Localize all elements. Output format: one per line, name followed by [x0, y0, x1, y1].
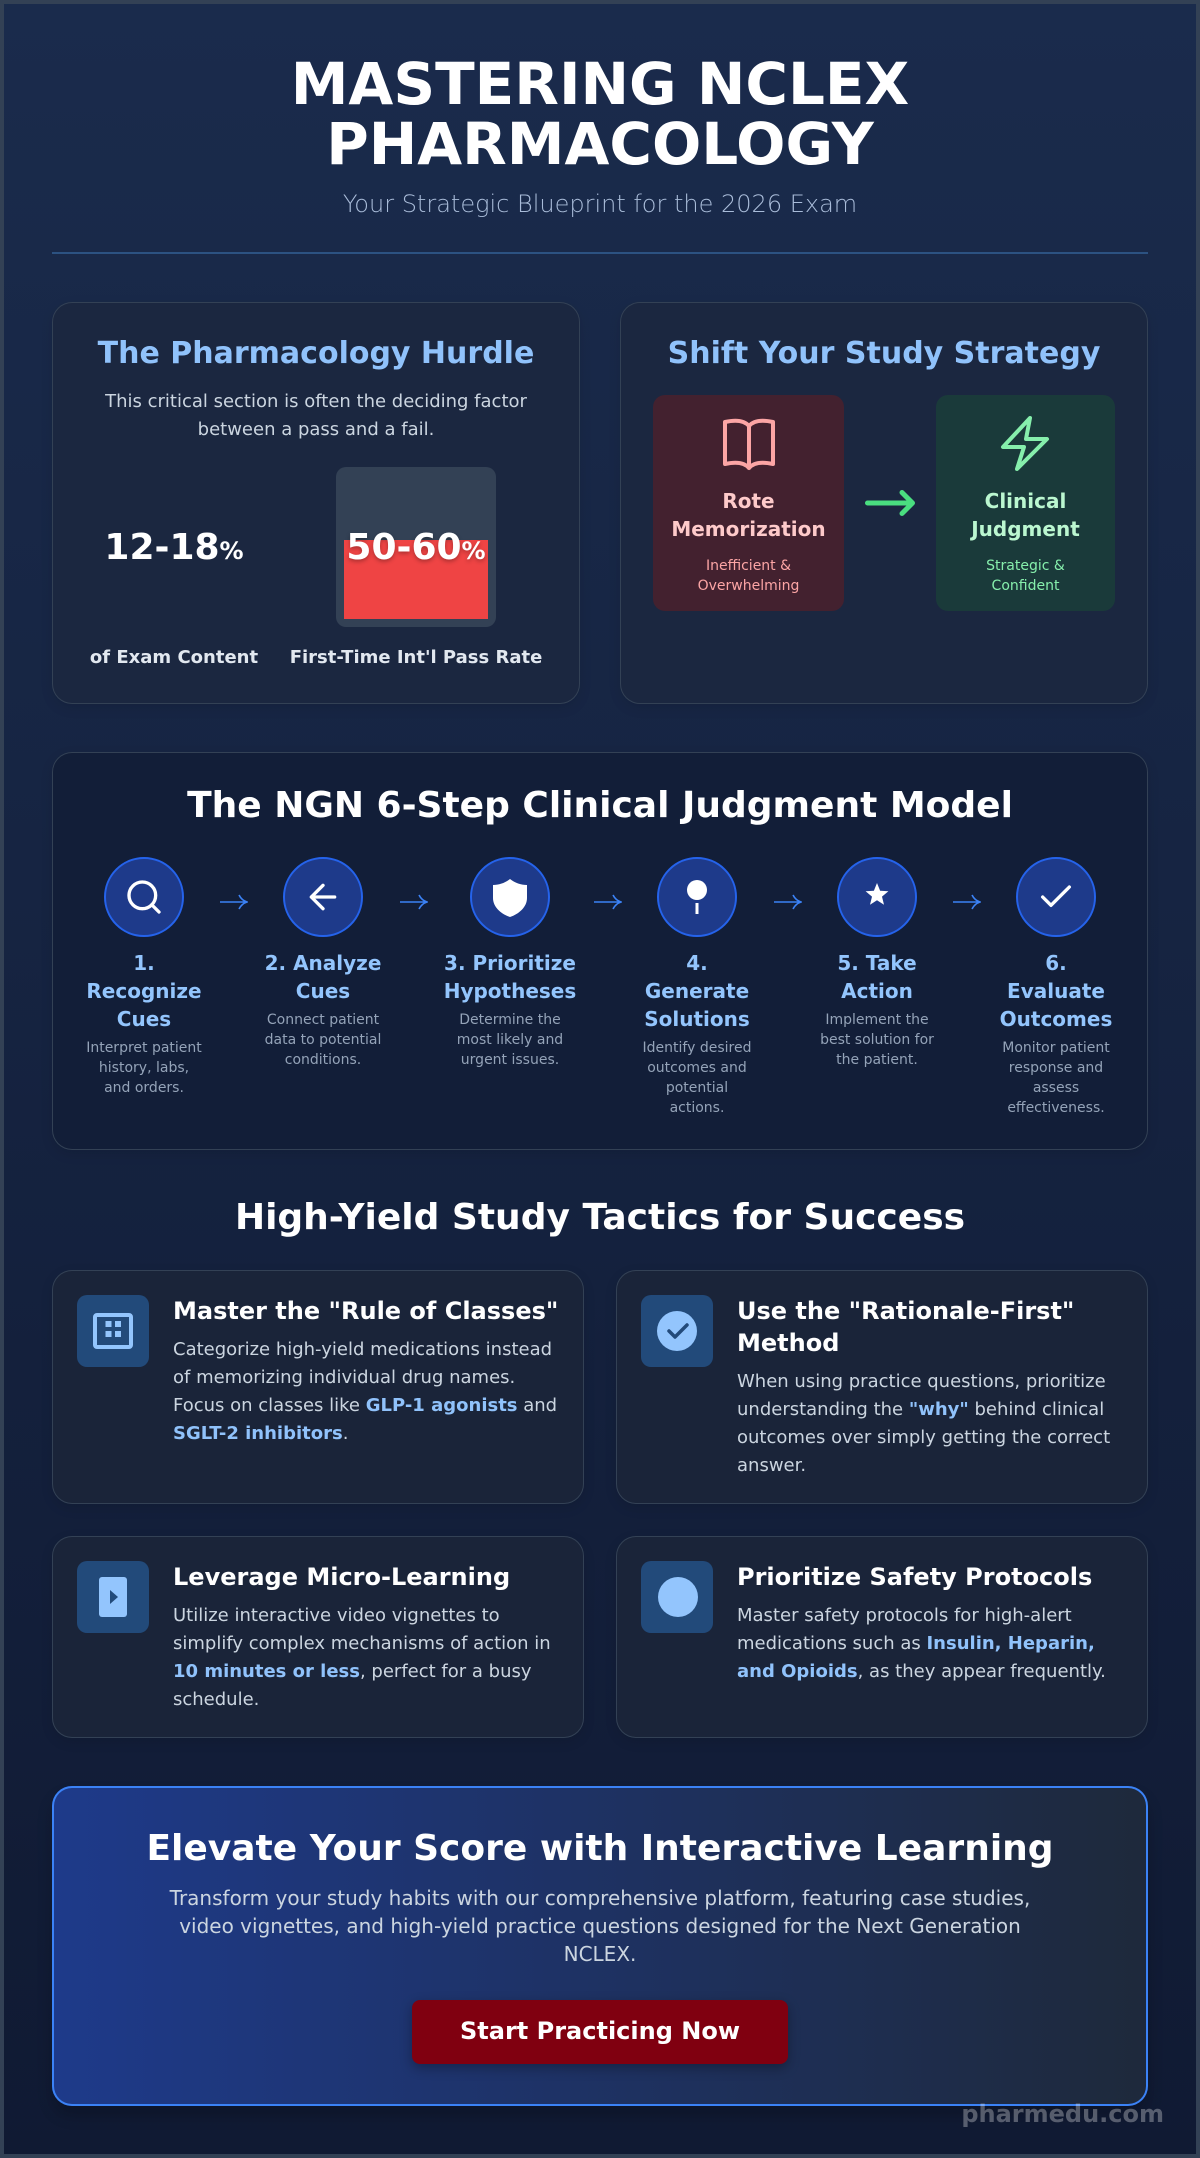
title: MASTERING NCLEX	[291, 50, 909, 118]
step 4: generate solutions: Solutions	[644, 1007, 750, 1031]
step 5: take action: Implement the	[825, 1012, 929, 1028]
icon: shield	[470, 857, 550, 937]
text: platform description: Transform your study habits with our comprehensive platform, featuring case studies,	[170, 1886, 1030, 1910]
label: clinical judgment: Clinical	[985, 489, 1066, 513]
caption: strategic: Strategic &	[986, 558, 1065, 574]
step 5: take action: the patient.	[836, 1052, 918, 1068]
box: rote memorization	[653, 395, 844, 611]
step 1: recognize cues: Recognize	[86, 979, 202, 1003]
text: rationale-first: outcomes over simply getting the correct	[737, 1427, 1110, 1448]
panel: rule of classes	[52, 1270, 584, 1504]
step 6: evaluate outcomes: response and	[1009, 1060, 1103, 1076]
step 2: analyze cues: conditions.	[285, 1052, 361, 1068]
label: rote memorization: Memorization	[671, 517, 826, 541]
text: rationale-first: answer.	[737, 1455, 806, 1476]
icon: open book	[723, 418, 775, 470]
step 5: take action: Action	[841, 979, 913, 1003]
step 6: evaluate outcomes: assess	[1033, 1080, 1079, 1096]
heading: elevate your score: Elevate Your Score with Interactive Learning	[146, 1828, 1054, 1869]
label: rote memorization	[671, 489, 826, 541]
text: platform description	[170, 1886, 1030, 1966]
step 4: generate solutions: outcomes and	[647, 1060, 747, 1076]
step 2: analyze cues: 2. Analyze	[265, 951, 381, 975]
button: start practicing	[412, 2000, 788, 2064]
heading: shift your study strategy: Shift Your Study Strategy	[668, 336, 1100, 371]
step 6: evaluate outcomes: Monitor patient	[1002, 1040, 1110, 1056]
subtitle: Your Strategic Blueprint for the 2026 Exam	[343, 190, 857, 218]
step 1: recognize cues: and orders.	[104, 1080, 184, 1096]
step 2: analyze cues: data to potential	[265, 1032, 381, 1048]
step 5: take action: best solution for	[820, 1032, 934, 1048]
icon: safety circle	[641, 1561, 713, 1633]
stat: 50-60%: 50-60%	[346, 527, 486, 568]
panel: micro-learning	[52, 1536, 584, 1738]
step 2: analyze cues	[265, 857, 381, 1068]
step 1: recognize cues: Cues	[117, 1007, 171, 1031]
heading: NGN model: The NGN 6-Step Clinical Judgment Model	[187, 785, 1013, 826]
panel: safety protocols	[616, 1536, 1148, 1738]
icon: arrow left	[283, 857, 363, 937]
step 3: prioritize hypotheses	[444, 857, 576, 1068]
icon: star	[837, 857, 917, 937]
step 5: take action	[820, 857, 934, 1068]
text: rule of classes: Categorize high-yield medications instead	[173, 1339, 552, 1360]
text: safety protocols: and Opioids, as they appear frequently.	[737, 1661, 1106, 1682]
label: clinical judgment: Judgment	[971, 517, 1080, 541]
text: rule of classes: Master the "Rule of Classes"	[173, 1297, 558, 1325]
arrow: rote to clinical	[865, 490, 915, 516]
panel: the pharmacology hurdle	[52, 302, 580, 704]
text: rule of classes: of memorizing individual drug names.	[173, 1367, 515, 1388]
title	[291, 50, 909, 178]
text: micro-learning: 10 minutes or less, perfect for a busy	[173, 1661, 532, 1682]
caption: inefficient: Overwhelming	[698, 578, 799, 594]
text: rationale-first: Use the "Rationale-First"	[737, 1297, 1074, 1325]
text: safety protocols: Prioritize Safety Protocols	[737, 1563, 1092, 1591]
text: platform description: NCLEX.	[564, 1942, 636, 1966]
arrow: step 1 to 2	[220, 894, 248, 910]
step 4: generate solutions: 4.	[686, 951, 708, 975]
text: rationale-first: understanding the "why" behind clinical	[737, 1399, 1104, 1420]
step 4: generate solutions: potential	[666, 1080, 728, 1096]
step 3: prioritize hypotheses: Hypotheses	[444, 979, 576, 1003]
text: rule of classes: Focus on classes like GLP-1 agonists and	[173, 1395, 557, 1416]
heading: high-yield tactics: High-Yield Study Tactics for Success	[235, 1197, 965, 1238]
step 6: evaluate outcomes: 6.	[1045, 951, 1067, 975]
panel: shift your study strategy	[620, 302, 1148, 704]
icon: video play	[77, 1561, 149, 1633]
button: start practicing: Start Practicing Now	[460, 2017, 740, 2045]
step 3: prioritize hypotheses: most likely and	[457, 1032, 563, 1048]
arrow: step 4 to 5	[774, 894, 802, 910]
step 3: prioritize hypotheses: Determine the	[459, 1012, 561, 1028]
heading: the pharmacology hurdle: The Pharmacology Hurdle	[98, 336, 534, 371]
text: rationale-first	[737, 1297, 1110, 1476]
text: hurdle intro	[105, 391, 527, 440]
icon: lightning bolt	[1000, 416, 1050, 471]
step 1: recognize cues	[86, 857, 202, 1096]
step 4: generate solutions: actions.	[670, 1100, 724, 1116]
caption: inefficient	[698, 558, 799, 594]
panel: call to action	[52, 1786, 1148, 2106]
text: safety protocols: Master safety protocols for high-alert	[737, 1605, 1072, 1626]
icon: search	[104, 857, 184, 937]
icon: lightbulb	[657, 857, 737, 937]
step 5: take action: 5. Take	[837, 951, 917, 975]
label: first-time pass rate: First-Time Int'l Pass Rate	[290, 647, 542, 668]
label: of exam content: of Exam Content	[90, 647, 258, 668]
step 2: analyze cues: Connect patient	[267, 1012, 379, 1028]
label: rote memorization: Rote	[722, 489, 775, 513]
text: platform description: video vignettes, and high-yield practice questions designed for the Next Generation	[179, 1914, 1021, 1938]
title: PHARMACOLOGY	[326, 110, 874, 178]
step 1: recognize cues: Interpret patient	[86, 1040, 202, 1056]
text: micro-learning: schedule.	[173, 1689, 259, 1710]
arrow: step 5 to 6	[953, 894, 981, 910]
text: hurdle intro: This critical section is often the deciding factor	[105, 391, 527, 412]
caption: strategic: Confident	[992, 578, 1059, 594]
step 1: recognize cues: history, labs,	[99, 1060, 189, 1076]
box: clinical judgment	[936, 395, 1115, 611]
step 3: prioritize hypotheses: urgent issues.	[461, 1052, 559, 1068]
label: clinical judgment	[970, 489, 1080, 541]
bar chart: pass rate gauge	[336, 467, 496, 627]
text: micro-learning: Leverage Micro-Learning	[173, 1563, 510, 1591]
step 6: evaluate outcomes: Evaluate	[1007, 979, 1105, 1003]
text: safety protocols: medications such as Insulin, Heparin,	[737, 1633, 1095, 1654]
icon: check	[1016, 857, 1096, 937]
panel: rationale-first method	[616, 1270, 1148, 1504]
text: micro-learning	[173, 1563, 551, 1710]
text: rationale-first: When using practice questions, prioritize	[737, 1371, 1106, 1392]
text: micro-learning: Utilize interactive video vignettes to	[173, 1605, 500, 1626]
panel: NGN 6-step clinical judgment model	[52, 752, 1148, 1150]
icon: grid	[77, 1295, 149, 1367]
watermark: pharmedu.com	[961, 2100, 1164, 2128]
step 4: generate solutions	[643, 857, 751, 1116]
step 6: evaluate outcomes: Outcomes	[1000, 1007, 1112, 1031]
text: rationale-first: Method	[737, 1329, 839, 1357]
text: micro-learning: simplify complex mechanisms of action in	[173, 1633, 551, 1654]
step 6: evaluate outcomes: effectiveness.	[1007, 1100, 1105, 1116]
step 3: prioritize hypotheses: 3. Prioritize	[444, 951, 576, 975]
caption: inefficient: Inefficient &	[706, 558, 791, 574]
step 4: generate solutions: Identify desired	[643, 1040, 751, 1056]
step 6: evaluate outcomes	[1000, 857, 1112, 1116]
step 4: generate solutions: Generate	[645, 979, 749, 1003]
text: hurdle intro: between a pass and a fail.	[198, 419, 434, 440]
arrow: step 3 to 4	[594, 894, 622, 910]
step 2: analyze cues: Cues	[296, 979, 350, 1003]
caption: strategic	[986, 558, 1065, 594]
text: rule of classes	[173, 1297, 558, 1444]
arrow: step 2 to 3	[400, 894, 428, 910]
text: safety protocols	[737, 1563, 1106, 1682]
step 1: recognize cues: 1.	[133, 951, 155, 975]
text: rule of classes: SGLT-2 inhibitors.	[173, 1423, 348, 1444]
bar fill: 50-60%	[344, 540, 488, 619]
stat: 12-18%: 12-18%	[104, 527, 244, 568]
icon: check circle	[641, 1295, 713, 1367]
